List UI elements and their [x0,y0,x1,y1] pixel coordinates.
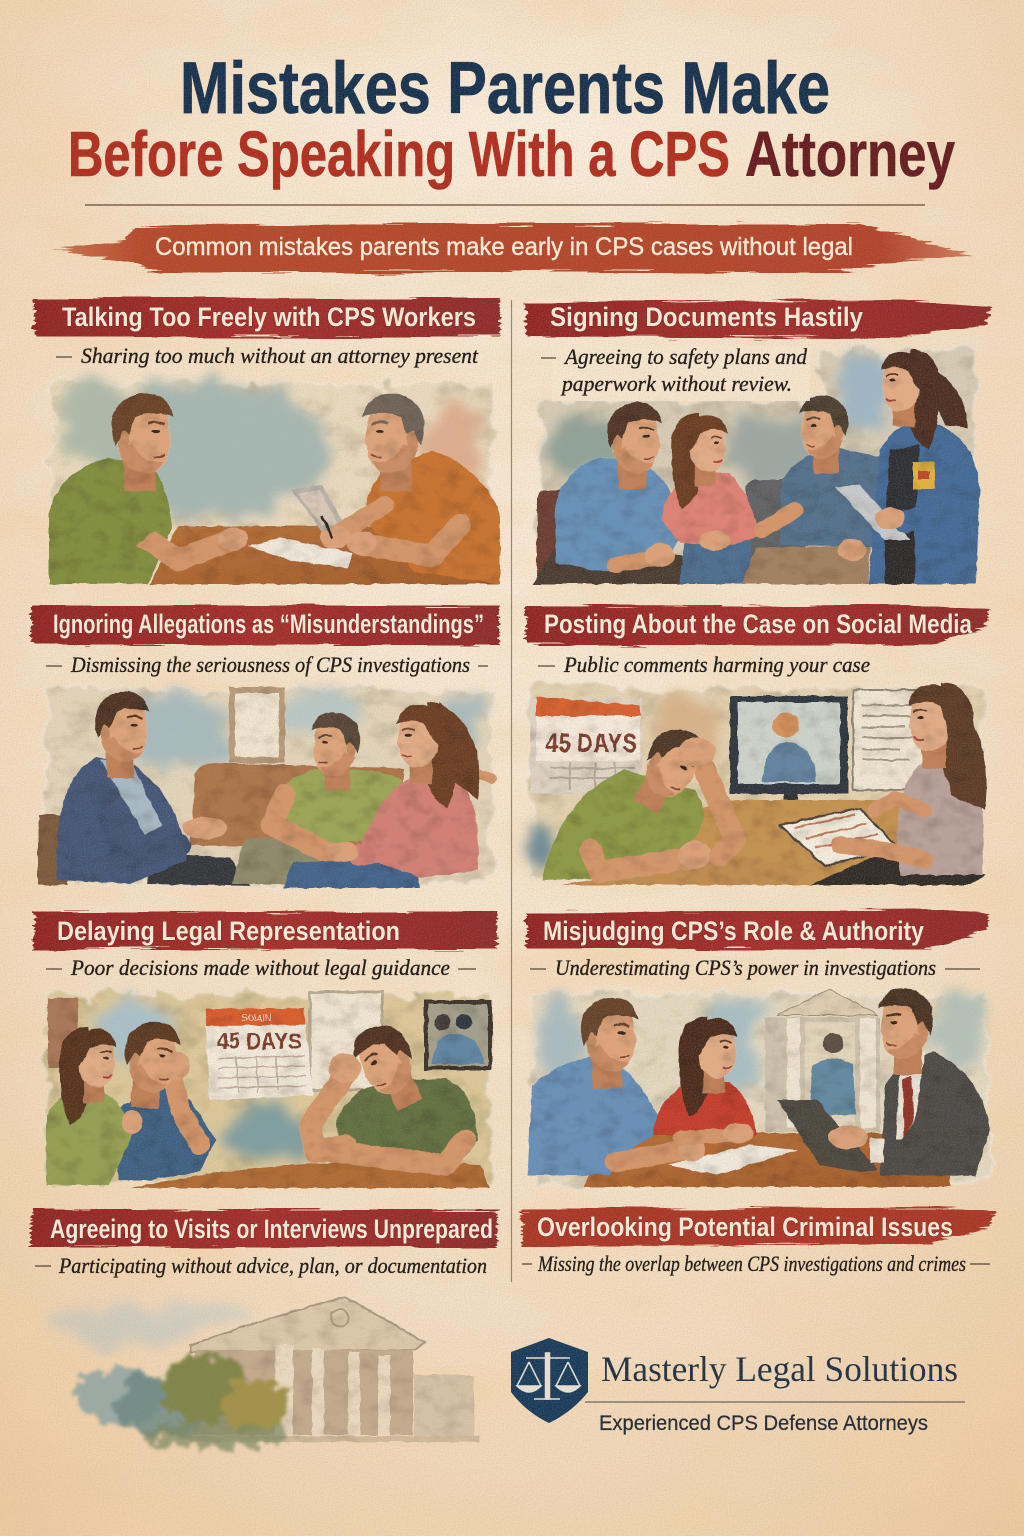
description: talking too freely: Sharing too much without an attorney present [81,343,479,368]
panel: misjudging CPS role [526,910,990,1187]
description: agreeing to visits: Participating without advice, plan, or documentation [58,1253,487,1278]
illustration: worried man, monitor and adviser: 45 DAYS [546,728,637,758]
illustration: worried family and 45 day calendar: 45 DAYS [217,1028,302,1054]
heading: delaying legal representation [34,912,497,949]
panel: overlooking criminal issues [521,1207,995,1276]
description: delaying legal representation: Poor decisions made without legal guidance [70,955,450,980]
description: signing documents: paperwork without review. [560,371,792,396]
illustration: worried family and 45 day calendar: SolAlN [241,1013,272,1024]
heading: ignoring allegations [31,606,499,645]
illustration: two men at a table [49,380,500,584]
illustration: attorney talking with couple [38,690,492,888]
title: Attorney [745,118,955,190]
description: signing documents: Agreeing to safety plans and [563,344,808,369]
heading: agreeing to visits: Agreeing to Visits or Interviews Unprepared [50,1214,493,1244]
title: Mistakes Parents Make [180,48,830,129]
description: misjudging CPS role: Underestimating CPS’s power in investigations [555,955,936,980]
firm name: Masterly Legal Solutions [601,1349,958,1389]
subtitle band: Common mistakes parents make early in CPS cases without legal [155,233,853,261]
heading: agreeing to visits [31,1210,497,1247]
heading: posting on social media [526,605,990,645]
title: Before Speaking With a CPS [68,118,730,190]
firm tagline: Experienced CPS Defense Attorneys [599,1412,928,1435]
heading: talking too freely: Talking Too Freely with CPS Workers [62,302,476,332]
heading: misjudging CPS role: Misjudging CPS’s Role & Authority [543,916,924,946]
illustration: worried man, monitor and adviser [528,682,987,885]
logo: shield with scales [511,1338,588,1423]
description: ignoring allegations: Dismissing the seriousness of CPS investigations [70,652,470,677]
illustration: worried family and 45 day calendar [46,992,490,1188]
description: posting on social media: Public comments harming your case [563,652,870,677]
title [68,48,955,190]
panel: signing documents [526,300,992,584]
panel: talking too freely [34,298,500,584]
panel: posting on social media [526,605,990,885]
illustration: couple with attorney and courthouse [527,988,990,1187]
subtitle band [50,224,975,272]
description: signing documents [541,344,810,401]
panel: ignoring allegations [31,606,499,888]
illustration: courthouse with trees [40,1296,480,1447]
heading: signing documents: Signing Documents Hastily [550,302,863,332]
heading: signing documents [526,300,992,338]
illustration: couple with worker on sofa [532,349,980,584]
panel: delaying legal representation [34,912,497,1188]
panel: agreeing to visits [31,1210,497,1278]
heading: overlooking criminal issues: Overlooking Potential Criminal Issues [537,1212,953,1242]
heading: delaying legal representation: Delaying Legal Representation [57,916,400,946]
heading: ignoring allegations: Ignoring Allegations as “Misunderstandings” [53,609,484,639]
heading: talking too freely [34,298,500,337]
